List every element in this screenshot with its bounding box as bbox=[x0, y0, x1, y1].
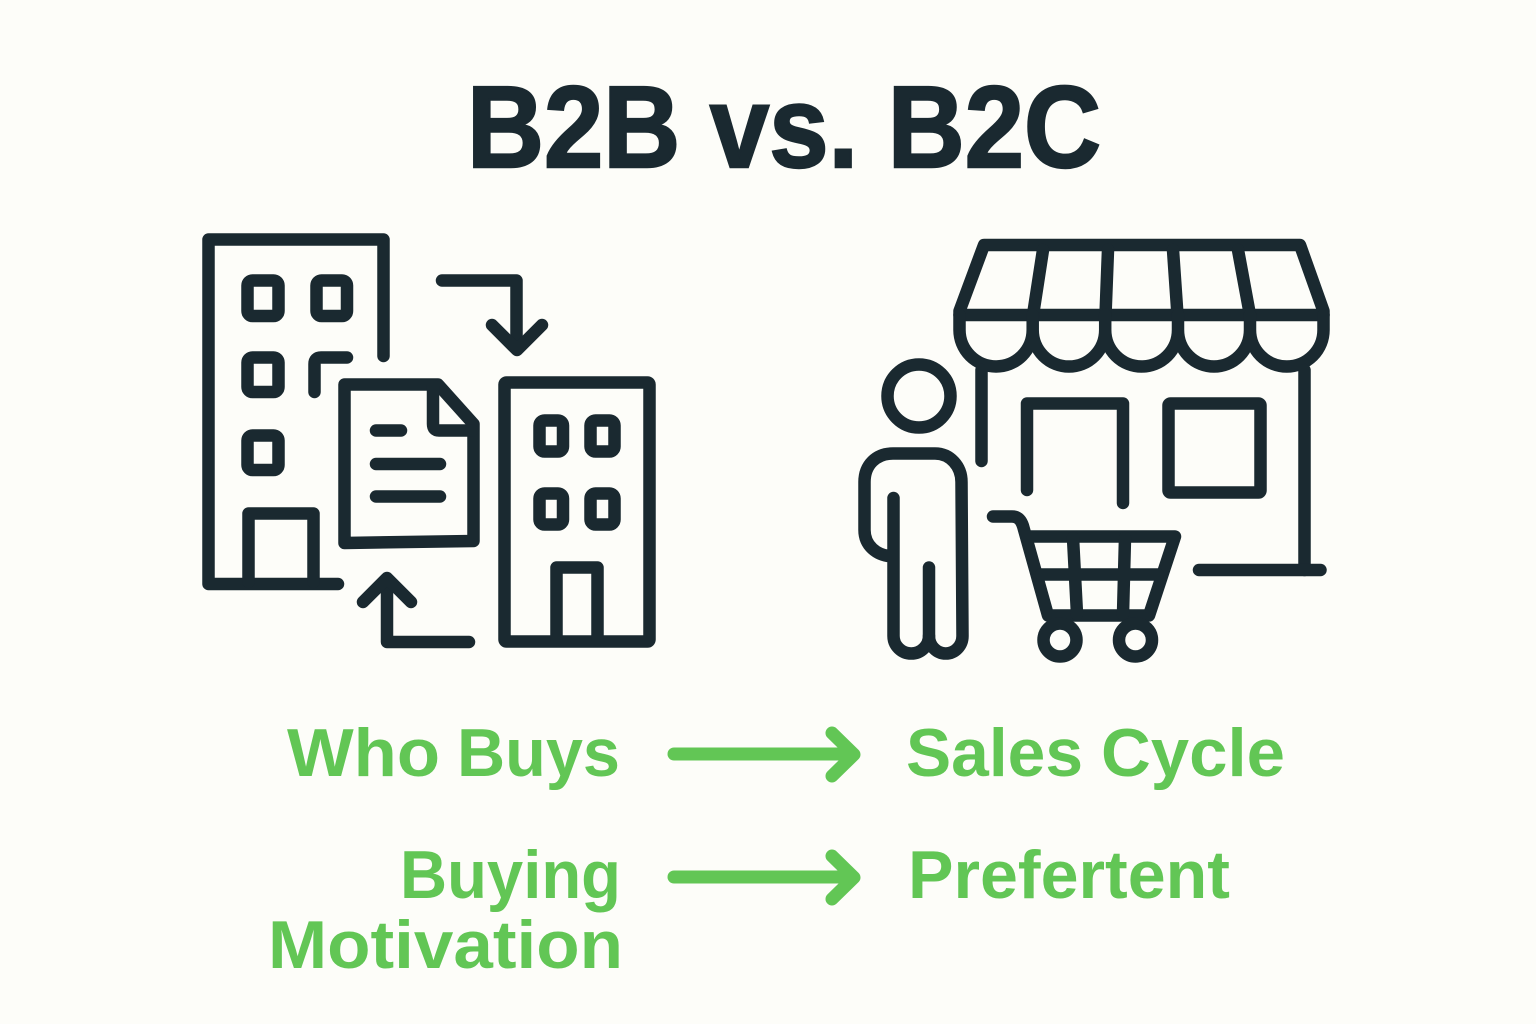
top arrow bbox=[442, 280, 542, 350]
label: Who Buys: Who bbox=[287, 715, 440, 791]
storefront walls, door and window bbox=[982, 370, 1320, 570]
bottom arrow bbox=[363, 578, 469, 642]
label: Buying Motivation bbox=[268, 837, 623, 983]
title: B2B vs. B2C bbox=[467, 62, 1101, 192]
arrow: row one bbox=[674, 733, 854, 776]
left building bbox=[208, 240, 384, 584]
label: Sales Cycle: Cycle bbox=[1101, 715, 1285, 791]
icon: B2B buildings and document exchange bbox=[208, 240, 650, 642]
label: Sales Cycle bbox=[906, 715, 1285, 791]
shopping cart bbox=[993, 516, 1175, 656]
awning bbox=[960, 245, 1324, 367]
label: Prefertent: Prefertent bbox=[908, 837, 1230, 913]
label: Who Buys bbox=[287, 715, 620, 791]
label: Buying Motivation: Motivation bbox=[268, 907, 623, 983]
label: Buying Motivation: Buying bbox=[400, 837, 621, 913]
arrow: row two bbox=[674, 856, 854, 899]
label: Sales Cycle: Sales bbox=[906, 715, 1083, 791]
icon: B2C store, shopper and cart bbox=[864, 245, 1324, 656]
document bbox=[344, 384, 474, 543]
shopper bbox=[864, 364, 962, 654]
label: Who Buys: Buys bbox=[457, 715, 620, 791]
right building bbox=[504, 382, 650, 642]
